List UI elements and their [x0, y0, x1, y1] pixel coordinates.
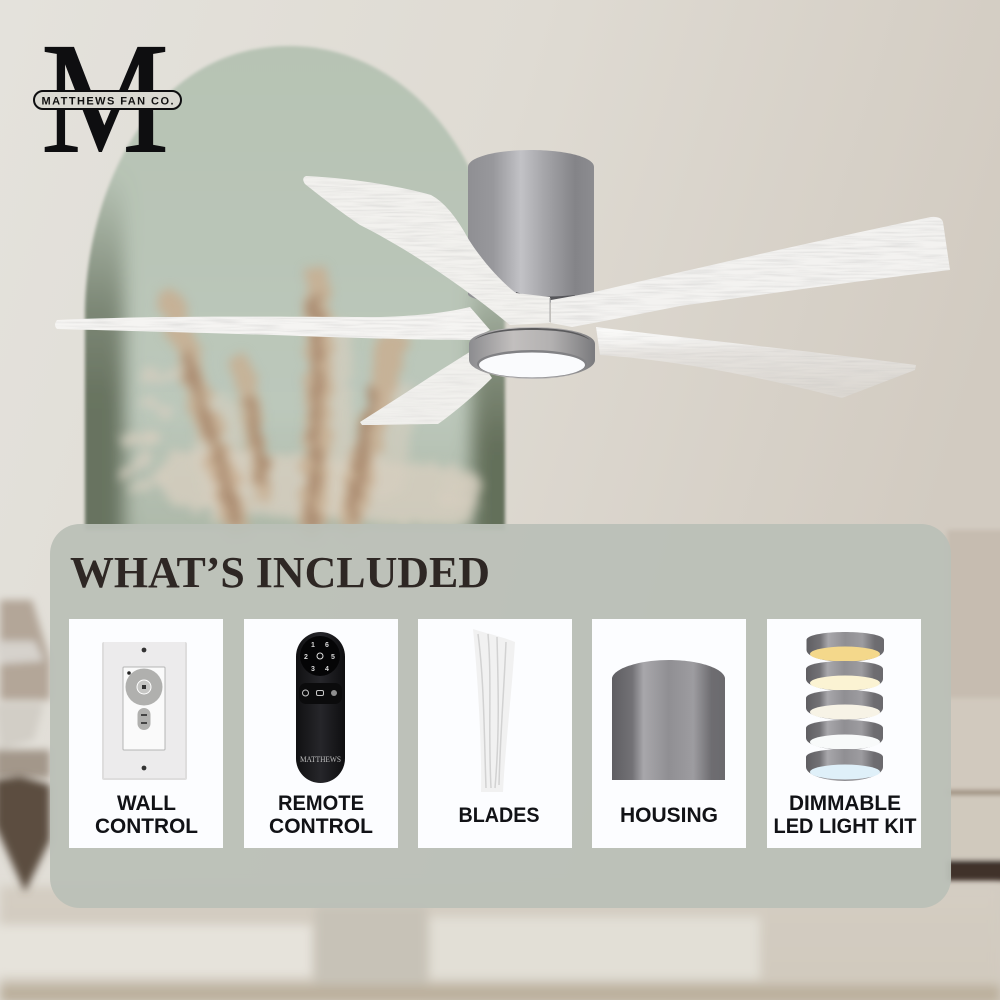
card: wall control: CONTROL — [95, 815, 198, 838]
blade: lower left — [360, 350, 492, 425]
sofa — [947, 530, 1000, 881]
blade: upper right — [551, 217, 950, 327]
icon: remote control: 2 — [304, 654, 308, 661]
icon: LED colour stack — [806, 632, 884, 781]
card: remote control — [244, 619, 398, 848]
icon: remote control: 4 — [325, 666, 329, 673]
light fluff — [122, 340, 470, 503]
panel: what's included — [50, 524, 951, 908]
logo: Matthews Fan Co.: MATTHEWS FAN CO. — [42, 96, 174, 108]
blade: left — [55, 307, 490, 340]
icon: remote control — [296, 632, 345, 783]
blade: lower right — [596, 327, 916, 398]
label: REMOTE — [278, 792, 364, 815]
label: HOUSING — [620, 804, 718, 827]
light kit ring — [469, 327, 595, 379]
icon: remote control: MATTHEWS — [300, 755, 341, 764]
tan plumes — [172, 282, 393, 525]
card: dimmable LED light kit: LED LIGHT KIT — [774, 815, 917, 838]
heading: WHAT’S INCLUDED — [70, 548, 490, 597]
LED lens — [479, 352, 585, 378]
floor and rug — [0, 886, 1000, 1000]
arched niche — [82, 44, 508, 524]
card: dimmable LED light kit — [767, 619, 921, 848]
fan — [55, 150, 950, 425]
icon: wall control — [102, 642, 187, 780]
logo: Matthews Fan Co.: M — [41, 10, 169, 186]
card: housing — [592, 619, 746, 848]
icon: remote control: 1 — [311, 642, 315, 649]
pampas grass — [122, 282, 470, 525]
fan housing — [468, 150, 594, 303]
blade: upper left — [303, 176, 550, 325]
card: wall control — [69, 619, 223, 848]
left pillows — [0, 600, 50, 892]
icon: remote control: 3 — [311, 666, 315, 673]
brown cores — [188, 300, 372, 525]
icon: blade stack — [473, 629, 515, 792]
label: WALL — [117, 792, 176, 815]
label: DIMMABLE — [789, 792, 901, 815]
icon: remote control: 6 — [325, 642, 329, 649]
card: blades — [418, 619, 572, 848]
icon: housing cylinder — [612, 660, 725, 780]
blades — [55, 176, 950, 425]
label: BLADES — [458, 804, 540, 827]
card: remote control: CONTROL — [269, 815, 373, 838]
icon: remote control: 5 — [331, 654, 335, 661]
